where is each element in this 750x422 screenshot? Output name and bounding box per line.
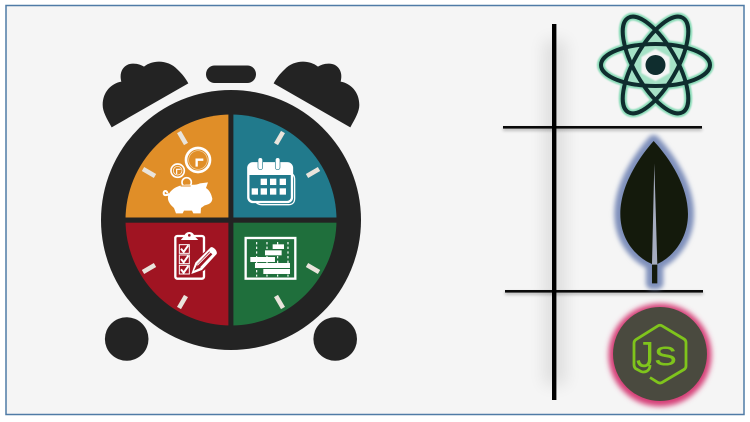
vertical divider (552, 24, 556, 400)
clock tick marks (143, 132, 319, 308)
icon: right foot (313, 317, 357, 361)
horizontal divider top (503, 126, 702, 130)
node JS letters: J (636, 334, 654, 375)
quadrant: green (233, 223, 341, 331)
node hexagon (634, 325, 686, 383)
vertical divider shadow (544, 40, 566, 385)
react orbits (601, 7, 710, 123)
icon: React atom (601, 7, 710, 123)
divider lines (503, 24, 703, 400)
quadrant: red (120, 223, 228, 331)
icon: left bell (103, 62, 188, 127)
node JS letters: S (654, 341, 676, 371)
icon: left foot (105, 317, 148, 361)
icon: top handle (206, 66, 256, 83)
icon: checklist and pencil (175, 232, 219, 279)
icon: MongoDB leaf (620, 141, 688, 283)
icon: piggy bank and coins (164, 148, 212, 213)
icon: calendar (248, 158, 295, 205)
icon: right bell (274, 62, 359, 127)
quadrant: orange (120, 110, 228, 218)
icon: gantt chart board (246, 238, 295, 279)
horizontal divider bottom (505, 290, 703, 294)
react glow (601, 7, 710, 123)
alarm clock (101, 62, 361, 361)
node glow (608, 304, 712, 406)
quadrant: teal (233, 110, 341, 218)
icon: Node.js badge (608, 304, 712, 406)
node JS letters (636, 334, 676, 375)
clock body (101, 90, 361, 350)
